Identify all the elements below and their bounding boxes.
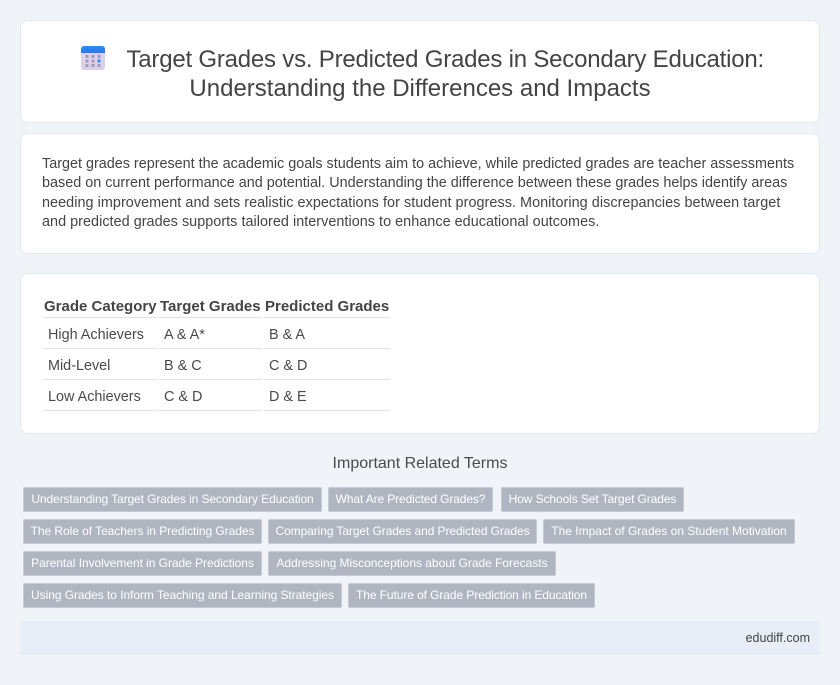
tag xyxy=(23,551,262,576)
intro text block: based on current performance and potential. Understanding the difference between these grades helps identify areas xyxy=(42,175,787,191)
row: high achievers: High Achievers xyxy=(48,327,144,343)
table header: Target Grades xyxy=(160,298,261,315)
tag: Using Grades to Inform Teaching and Learning Strategies xyxy=(31,588,334,602)
tag: Parental Involvement in Grade Predictions xyxy=(31,556,254,570)
tag: How Schools Set Target Grades xyxy=(509,492,676,506)
table xyxy=(43,298,390,411)
heading: Target Grades vs. Predicted Grades in Secondary Education: xyxy=(126,46,764,73)
tag xyxy=(23,487,322,512)
title panel xyxy=(20,20,820,123)
tag: Addressing Misconceptions about Grade Forecasts xyxy=(276,556,548,570)
tag: The Impact of Grades on Student Motivation xyxy=(551,524,787,538)
row: mid-level: C & D xyxy=(269,358,307,374)
footer credit: edudiff.com xyxy=(746,631,810,645)
tag xyxy=(328,487,493,512)
row: low achievers: C & D xyxy=(164,389,202,405)
table header: Predicted Grades xyxy=(265,298,389,315)
row: mid-level: B & C xyxy=(164,358,202,374)
intro text block: and predicted grades supports tailored interventions to enhance educational outcomes. xyxy=(42,214,599,230)
row: high achievers: A & A* xyxy=(164,327,205,343)
footer xyxy=(20,621,820,655)
row: mid-level xyxy=(48,358,307,374)
intro text block: needing improvement and sets realistic expectations for student progress. Monitoring discrepancies between target xyxy=(42,195,780,211)
row: low achievers: D & E xyxy=(269,389,307,405)
intro text block xyxy=(42,156,794,230)
related term tags xyxy=(23,487,795,608)
row: mid-level: Mid-Level xyxy=(48,358,110,374)
row: high achievers xyxy=(48,327,305,343)
tag xyxy=(543,519,795,544)
tag xyxy=(268,551,556,576)
row: high achievers: B & A xyxy=(269,327,305,343)
row: low achievers: Low Achievers xyxy=(48,389,141,405)
intro text block: Target grades represent the academic goals students aim to achieve, while predicted grades are teacher assessments xyxy=(42,156,794,172)
tag: The Future of Grade Prediction in Education xyxy=(356,588,587,602)
row: low achievers xyxy=(48,389,307,405)
table header: Grade Category xyxy=(44,298,157,315)
tag xyxy=(348,583,595,608)
heading xyxy=(126,46,764,102)
heading: related terms: Important Related Terms xyxy=(333,455,507,472)
table header xyxy=(44,298,389,315)
icon: calendar xyxy=(81,46,105,70)
panel: grade table xyxy=(20,273,820,434)
panel: introduction xyxy=(20,133,820,254)
tag: What Are Predicted Grades? xyxy=(336,492,485,506)
tag xyxy=(23,583,342,608)
tag: Comparing Target Grades and Predicted Grades xyxy=(276,524,529,538)
heading: Understanding the Differences and Impacts xyxy=(189,75,651,102)
tag xyxy=(268,519,537,544)
tag xyxy=(501,487,684,512)
tag: The Role of Teachers in Predicting Grades xyxy=(31,524,254,538)
tag xyxy=(23,519,262,544)
tag: Understanding Target Grades in Secondary Education xyxy=(31,492,314,506)
